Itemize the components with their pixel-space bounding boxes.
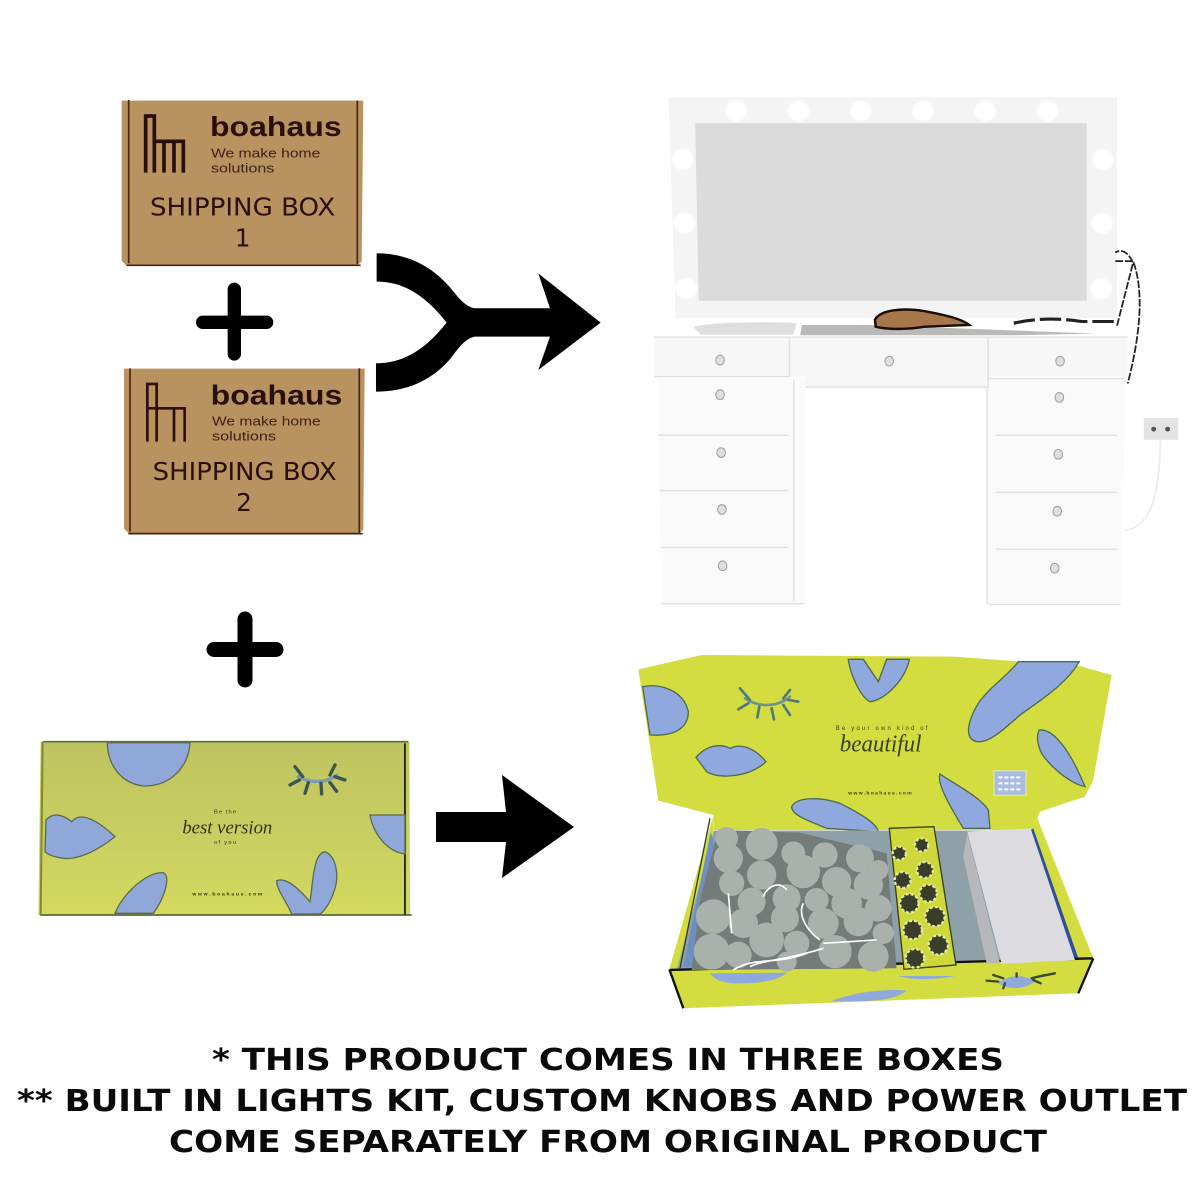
- footnote line 3: COME SEPARATELY FROM ORIGINAL PRODUCT: [169, 1125, 1048, 1160]
- custom knobs tray: [889, 827, 956, 969]
- drawer knobs: [716, 355, 1064, 573]
- icon: boahaus chair logo: [147, 384, 185, 442]
- lid slogan: www.boahaus.com: [847, 790, 912, 796]
- box label: 1: [235, 223, 250, 252]
- tagline: We make home: [212, 414, 321, 428]
- arrow: accessory box to contents: [436, 775, 574, 878]
- lid slogan: beautiful: [840, 732, 922, 758]
- lid slogan: [836, 726, 928, 796]
- box label: SHIPPING BOX: [150, 192, 335, 221]
- box label: SHIPPING BOX: [153, 457, 337, 486]
- front panel pattern: [710, 973, 1035, 1002]
- open yellow accessory box: [638, 655, 1112, 1008]
- box label: 2: [236, 488, 252, 517]
- plus sign between shipping boxes: [203, 289, 267, 354]
- shipping box 2: [124, 368, 365, 534]
- icon: boahaus chair logo: [146, 116, 183, 173]
- mirror bulbs: [672, 101, 1113, 299]
- icon: closed eye lashes: [738, 688, 798, 719]
- closed yellow accessory box: [38, 742, 412, 915]
- icon: closed eye lashes: [290, 765, 345, 794]
- light bulbs bag: [692, 827, 897, 972]
- power outlet: [1124, 418, 1178, 530]
- arrow: two boxes merge into vanity: [376, 253, 601, 392]
- brand name: boahaus: [211, 380, 342, 411]
- cables: [1014, 251, 1140, 384]
- box slogan: www.boahaus.com: [191, 891, 263, 897]
- box slogan: of you: [214, 840, 236, 846]
- vanity desk body: [654, 337, 1128, 604]
- blue pattern shapes: [45, 743, 405, 914]
- lid blue pattern shapes: [643, 659, 1085, 832]
- tagline: solutions: [212, 430, 276, 444]
- icon: small lid label: [994, 771, 1026, 795]
- vanity illustration: [654, 97, 1178, 604]
- lid slogan: Be your own kind of: [836, 726, 928, 732]
- plus sign before accessory box: [214, 619, 276, 680]
- hair dryer: [875, 310, 969, 329]
- footnote line 1: * THIS PRODUCT COMES IN THREE BOXES: [212, 1043, 1004, 1078]
- power outlet white box: [963, 828, 1075, 964]
- desk top glass tray: [693, 322, 1096, 335]
- box slogan: best version: [182, 817, 272, 838]
- box slogan: Be the: [214, 809, 236, 815]
- tagline: We make home: [211, 146, 320, 160]
- mirror: [668, 97, 1117, 318]
- icon: front panel lashes: [987, 973, 1055, 988]
- box tray: [669, 813, 1093, 1008]
- box slogan: [182, 809, 272, 897]
- open lid: [638, 655, 1112, 832]
- footnote line 2: ** BUILT IN LIGHTS KIT, CUSTOM KNOBS AND POWER OUTLET: [17, 1084, 1188, 1119]
- shipping box 1: [122, 100, 363, 266]
- footnote text: [17, 1043, 1188, 1160]
- brand name: boahaus: [210, 111, 342, 142]
- tagline: solutions: [211, 162, 274, 176]
